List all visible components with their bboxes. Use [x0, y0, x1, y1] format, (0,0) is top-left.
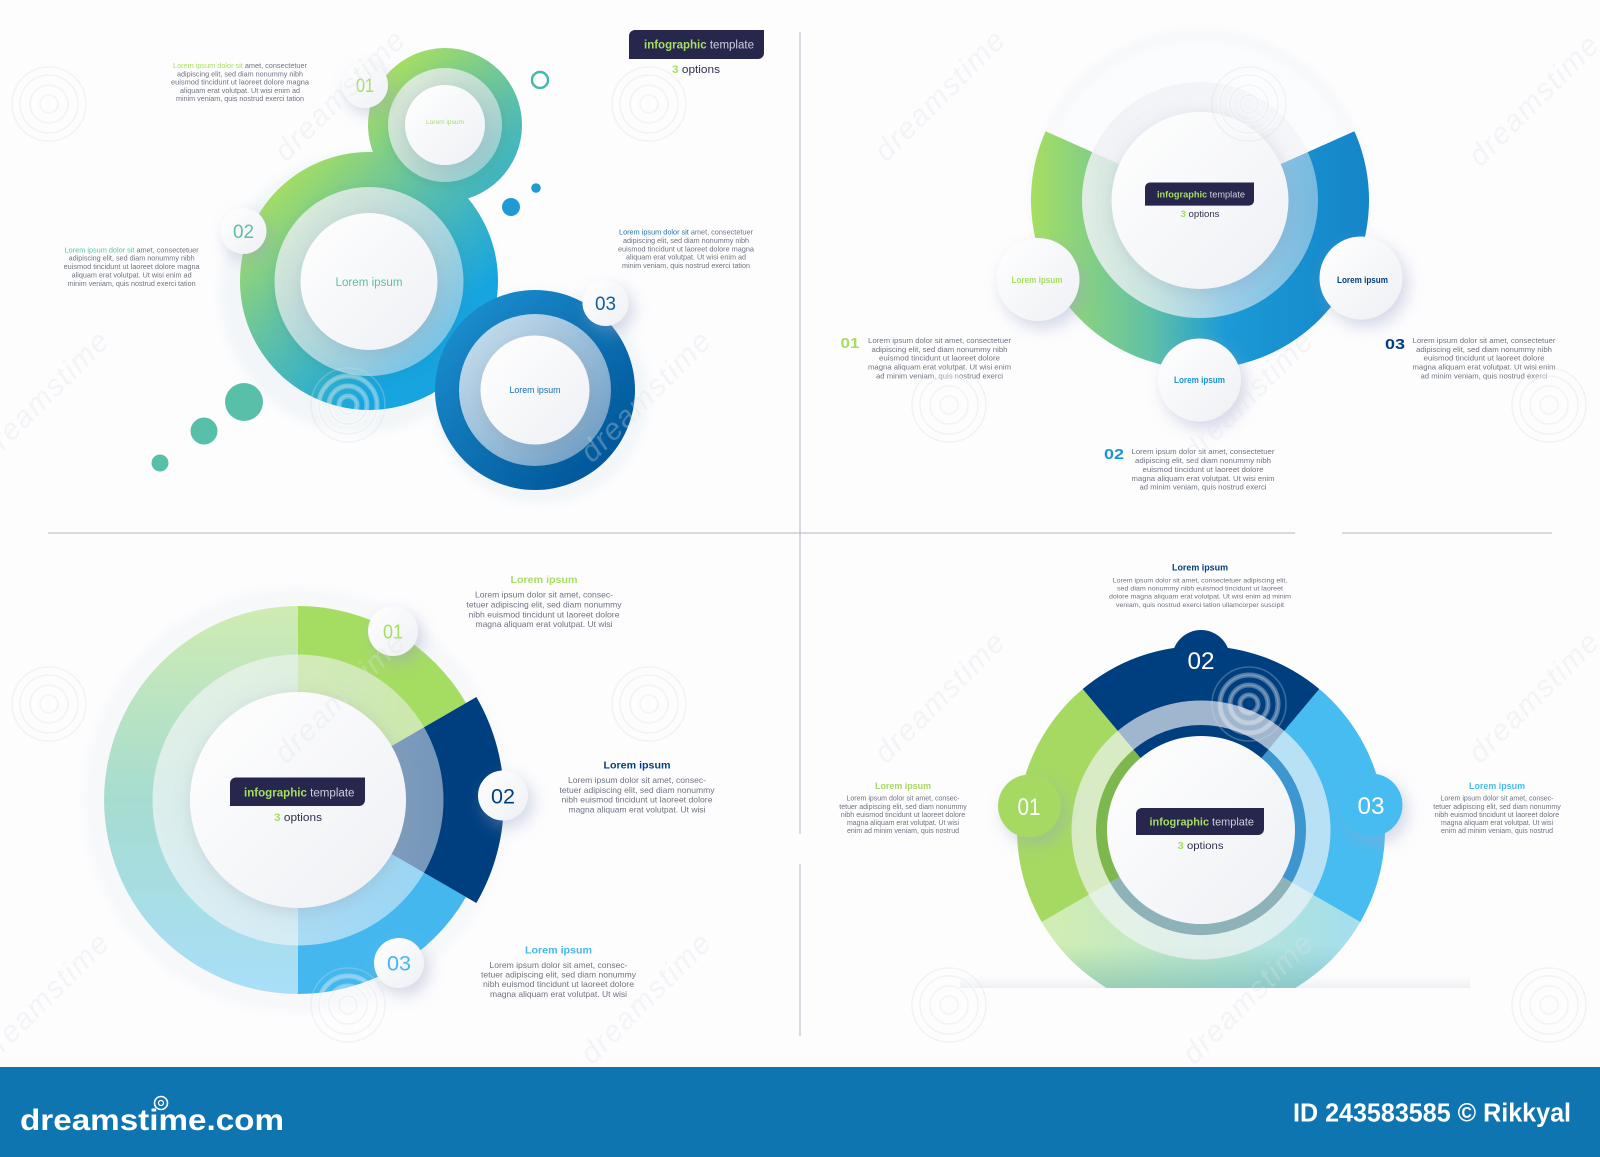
text block 01: magna aliquam erat volutpat. Ut wisi: [847, 820, 959, 827]
footer credit: ID 243583585 © Rikkyal: [1293, 1100, 1571, 1128]
text block 03: adipiscing elit, sed diam nonummy nibh: [1416, 345, 1552, 354]
watermark overlay: dreamstime: [868, 23, 1013, 168]
horseshoe sector: [1031, 131, 1369, 369]
circle 03: [435, 290, 635, 490]
heading: infographic template: [629, 30, 764, 76]
bubble: left: [996, 238, 1080, 321]
watermark overlay: dreamstime: [268, 23, 413, 168]
text block 01: tetuer adipiscing elit, sed diam nonummy: [839, 804, 967, 811]
text block 01: Lorem ipsum: [875, 781, 931, 791]
number badge 03: 03: [387, 952, 411, 976]
heading: infographic template: infographic template: [1150, 816, 1254, 828]
number 02: 02: [1188, 648, 1214, 675]
heading: infographic template: infographic template: [244, 788, 354, 800]
centre disc: [190, 692, 406, 908]
translucent middle ring: [152, 654, 444, 946]
text block 01: enim ad minim veniam, quis nostrud: [847, 828, 959, 835]
text block 02: Lorem ipsum dolor sit amet, consectetuer: [1132, 447, 1275, 456]
text block 03: 03: [1385, 336, 1405, 353]
bubble: right: Lorem ipsum: [1337, 275, 1388, 285]
ground shadow: [960, 976, 1470, 988]
number badge 01: [368, 606, 418, 656]
bubble: bottom: Lorem ipsum: [1174, 375, 1225, 385]
heading: infographic template: infographic template: [1157, 190, 1245, 200]
watermark overlay: dreamstime: [574, 926, 719, 1071]
text block 03: Lorem ipsum dolor sit amet, consec-: [1440, 796, 1554, 802]
text block 02: [560, 760, 715, 814]
bubble: bottom: [1158, 338, 1241, 422]
watermark overlay: dreamstime: [1176, 324, 1321, 469]
text block 01: 01: [840, 335, 860, 352]
text block 03: Lorem ipsum: [1469, 781, 1525, 791]
bubble: right: [1320, 236, 1402, 320]
blob: circles 01 and 02: [240, 48, 522, 410]
number badge 01: 01: [356, 76, 374, 97]
text block 02: 02: [1104, 446, 1124, 463]
text block 02: minim veniam, quis nostrud exerci tation: [68, 279, 196, 288]
text block 02: adipiscing elit, sed diam nonummy nibh: [1135, 456, 1271, 465]
text block 02: tetuer adipiscing elit, sed diam nonummy: [560, 785, 715, 795]
text block 01: Lorem ipsum dolor sit amet, consectetuer: [173, 61, 308, 70]
text block 03: Lorem ipsum: [525, 944, 592, 956]
text block 03: [618, 228, 755, 270]
text block 02: aliquam erat volutpat. Ut wisi enim ad: [72, 270, 192, 280]
heading: infographic template: 3 options: [274, 812, 323, 824]
translucent middle ring: [1082, 82, 1318, 318]
number badge 01: 01: [1018, 794, 1040, 821]
heading: infographic template: 3 options: [1180, 209, 1220, 219]
decorative dots: [152, 72, 548, 472]
circle labels: [336, 119, 560, 395]
text block 03: enim ad minim veniam, quis nostrud: [1441, 828, 1553, 835]
text block 01: nibh euismod tincidunt ut laoreet dolore: [841, 812, 965, 819]
text block 01: Lorem ipsum: [510, 574, 578, 586]
text block 01: magna aliquam erat volutpat. Ut wisi enim: [868, 362, 1011, 372]
text block 01: Lorem ipsum dolor sit amet, consectetuer: [868, 336, 1012, 345]
text block 03: [1433, 781, 1561, 835]
text block 01: aliquam erat volutpat. Ut wisi enim ad: [180, 86, 300, 95]
number badge 02: [220, 208, 266, 254]
text block 01: minim veniam, quis nostrud exerci tation: [176, 94, 304, 103]
panel: option one, linked circles: [64, 30, 764, 504]
text block 02: ad minim veniam, quis nostrud exerci: [1140, 482, 1267, 492]
heading: infographic template: 3 options: [672, 64, 721, 76]
circle 02 rings: [274, 187, 464, 376]
sector 01: [1017, 689, 1201, 922]
soft halos behind circles: [220, 153, 648, 504]
text block 03: Lorem ipsum dolor sit amet, consectetuer: [619, 228, 754, 237]
text block 03: [1385, 336, 1556, 380]
text block 02: sed diam nonummy nibh euismod tincidunt ut laoreet: [1117, 586, 1283, 592]
translucent middle ring: [1072, 700, 1330, 960]
circle 01 rings: [388, 68, 502, 182]
number badge 03: 03: [1358, 793, 1384, 820]
bubble: left: Lorem ipsum: [1012, 275, 1062, 285]
text block 03: Lorem ipsum dolor sit amet, consec-: [490, 960, 628, 970]
sector 02: [298, 697, 504, 903]
text block 03: aliquam erat volutpat. Ut wisi enim ad: [626, 253, 746, 262]
centre disc: [1107, 736, 1295, 924]
text block 01: nibh euismod tincidunt ut laoreet dolore: [468, 609, 620, 619]
faint left halo: [84, 588, 508, 1012]
number badge 01: [998, 774, 1061, 838]
text block 02: Lorem ipsum dolor sit amet, consectetuer: [65, 245, 199, 254]
text block 02: euismod tincidunt ut laoreet dolore magna: [64, 262, 200, 271]
text block 01: euismod tincidunt ut laoreet dolore magna: [171, 78, 310, 87]
sector 03: [298, 800, 466, 994]
text block 02: Lorem ipsum: [604, 760, 670, 772]
text block 02: Lorem ipsum dolor sit amet, consectetuer adipiscing elit,: [1113, 578, 1287, 584]
number badge 01: 01: [383, 620, 403, 644]
thin coloured ring: [1096, 725, 1306, 935]
watermark overlay: dreamstime: [574, 324, 719, 469]
text block 03: Lorem ipsum dolor sit amet, consectetuer: [1412, 336, 1556, 345]
number badge 03: [374, 938, 424, 988]
text block 02: nibh euismod tincidunt ut laoreet dolore: [562, 795, 713, 805]
text block 03: magna aliquam erat volutpat. Ut wisi: [1441, 820, 1553, 827]
circle labels: Lorem ipsum: [336, 277, 402, 289]
text block 03: euismod tincidunt ut laoreet dolore magna: [618, 244, 755, 253]
circle labels: Lorem ipsum: [510, 385, 560, 395]
text block 02: veniam, quis nostrud exerci tation ullamcorper suscipit: [1116, 602, 1284, 609]
text block 01: [839, 781, 967, 835]
bottom faded sector: [1042, 882, 1360, 988]
watermark overlay: dreamstime: [268, 625, 413, 770]
panel: option four, grounded ring: [839, 562, 1561, 1014]
text block 01: magna aliquam erat volutpat. Ut wisi: [476, 619, 613, 629]
text block 02: adipiscing elit, sed diam nonummy nibh: [69, 254, 195, 263]
text block 03: minim veniam, quis nostrud exerci tation: [622, 261, 750, 270]
faint upper ring: [1034, 34, 1366, 366]
text block 03: nibh euismod tincidunt ut laoreet dolore: [1435, 812, 1559, 819]
sector 01: [298, 606, 466, 800]
text block 03: euismod tincidunt ut laoreet dolore: [1424, 354, 1544, 363]
text block 03: tetuer adipiscing elit, sed diam nonummy: [481, 970, 637, 980]
panel: option three, ring with raised sector: [84, 574, 715, 1012]
text block 03: adipiscing elit, sed diam nonummy nibh: [623, 236, 749, 245]
text block 03: [481, 944, 637, 999]
text block 03: magna aliquam erat volutpat. Ut wisi enim: [1412, 362, 1556, 372]
sector 02 with bump: [1083, 630, 1319, 830]
centre disc: [1112, 112, 1288, 289]
text block 03: ad minim veniam, quis nostrud exerci: [1420, 371, 1548, 380]
text block 01: ad minim veniam, quis nostrud exerci: [876, 371, 1003, 380]
text block 01: Lorem ipsum dolor sit amet, consec-: [846, 796, 960, 802]
circle labels: Lorem ipsum: [426, 119, 464, 126]
footer bar: [0, 1067, 1600, 1157]
number badge 03: [1340, 774, 1402, 836]
faded left half: [104, 606, 298, 994]
number badge 02: 02: [491, 784, 515, 808]
text block 03: nibh euismod tincidunt ut laoreet dolore: [483, 979, 634, 989]
sector 03: [1201, 689, 1385, 922]
footer logo: dreamstime.com: [20, 1104, 284, 1137]
heading: infographic template: infographic template: [644, 40, 754, 52]
number badge 02: 02: [233, 222, 254, 243]
number badge 03: 03: [595, 294, 616, 315]
watermark overlay: dreamstime: [868, 625, 1013, 770]
text block 01: [466, 574, 622, 629]
text block 02: [1109, 562, 1291, 609]
text block 02: Lorem ipsum dolor sit amet, consec-: [568, 775, 706, 785]
heading: infographic template: [1136, 808, 1264, 852]
text block 01: adipiscing elit, sed diam nonummy nibh: [177, 70, 303, 78]
text block 02: dolore magna aliquam erat volutpat. Ut wisi enim ad minim: [1109, 594, 1291, 601]
text block 01: [171, 61, 310, 103]
text block 03: magna aliquam erat volutpat. Ut wisi: [490, 989, 627, 999]
text block 02: euismod tincidunt ut laoreet dolore: [1142, 465, 1264, 474]
watermark overlay: dreamstime: [1176, 926, 1321, 1071]
text block 01: euismod tincidunt ut laoreet dolore: [879, 354, 1000, 363]
text block 01: Lorem ipsum dolor sit amet, consec-: [475, 590, 613, 600]
text block 02: [1104, 446, 1275, 492]
heading: infographic template: [1145, 182, 1254, 219]
text block 01: adipiscing elit, sed diam nonummy nibh: [872, 345, 1008, 354]
text block 01: tetuer adipiscing elit, sed diam nonummy: [466, 600, 622, 610]
panel: option two, horseshoe: [840, 34, 1556, 492]
number badge 01: [342, 62, 388, 108]
heading: infographic template: 3 options: [1178, 840, 1224, 852]
heading: infographic template: [230, 778, 365, 824]
number badge 03: [582, 280, 628, 326]
text block 02: magna aliquam erat volutpat. Ut wisi: [568, 804, 706, 814]
text block 03: tetuer adipiscing elit, sed diam nonummy: [1433, 804, 1561, 811]
text block 01: [840, 335, 1012, 380]
number badge 02: [478, 770, 528, 820]
text block 02: [64, 245, 200, 288]
text block 02: Lorem ipsum: [1172, 562, 1228, 572]
text block 02: magna aliquam erat volutpat. Ut wisi enim: [1132, 474, 1274, 483]
